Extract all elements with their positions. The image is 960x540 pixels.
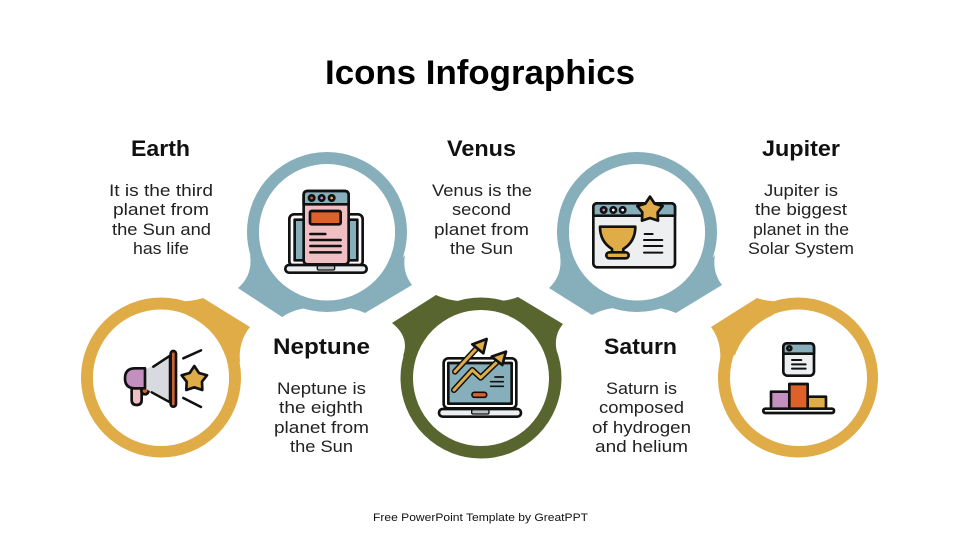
panel: Earth ring	[87, 298, 250, 452]
text block: Neptune: planet from	[274, 419, 369, 437]
icon: podium with calendar	[763, 343, 834, 413]
text block: Jupiter	[748, 136, 854, 258]
text block: Venus: the Sun	[450, 240, 513, 258]
panel: Saturn ring	[549, 158, 722, 315]
text block: Jupiter: the biggest	[755, 201, 847, 219]
text block: Venus: Venus	[447, 136, 516, 161]
text block: Neptune: Neptune is	[277, 380, 366, 398]
text block: Neptune	[273, 334, 370, 456]
text block: Earth: has life	[133, 240, 189, 258]
text block: Earth: the Sun and	[112, 221, 211, 239]
icon: laptop with growth arrows	[439, 339, 521, 417]
text block: Venus: Venus is the	[432, 182, 532, 200]
text block: Venus	[432, 136, 532, 258]
text block: Saturn	[592, 334, 691, 456]
text block: Saturn: Saturn is	[606, 380, 677, 398]
footer: Free PowerPoint Template by GreatPPT	[373, 512, 588, 524]
text block: Neptune: the eighth	[279, 399, 363, 417]
text block: Neptune: the Sun	[290, 438, 353, 456]
text block: Earth: Earth	[131, 136, 190, 161]
text block: Venus: planet from	[434, 221, 529, 239]
text block: Earth	[109, 136, 213, 258]
text block: Saturn: and helium	[595, 438, 688, 456]
icon: browser window with trophy and star	[593, 197, 675, 267]
text block: Saturn: of hydrogen	[592, 419, 691, 437]
text block: Jupiter: Solar System	[748, 240, 854, 258]
text block: Saturn: composed	[599, 399, 684, 417]
text block: Jupiter: planet in the	[753, 221, 849, 239]
text block: Neptune: Neptune	[273, 334, 370, 359]
title: Icons Infographics	[325, 54, 635, 92]
panel: Venus ring	[392, 295, 563, 452]
text block: Venus: second	[452, 201, 511, 219]
text block: Earth: planet from	[113, 201, 209, 219]
text block: Jupiter: Jupiter	[762, 136, 840, 161]
text block: Saturn: Saturn	[604, 334, 677, 359]
panel: Jupiter ring	[711, 298, 872, 452]
icon: laptop with web page	[285, 191, 367, 273]
panel: Neptune ring	[238, 158, 412, 317]
icon: megaphone with star	[125, 350, 207, 407]
text block: Jupiter: Jupiter is	[764, 182, 838, 200]
text block: Earth: It is the third	[109, 182, 213, 200]
